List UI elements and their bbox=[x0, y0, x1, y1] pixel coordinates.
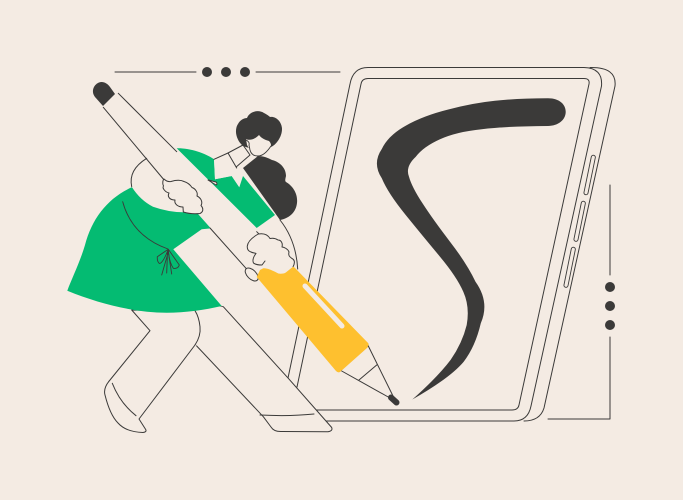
hair bbox=[236, 111, 282, 150]
pencil highlight bbox=[305, 286, 342, 326]
back hair bbox=[243, 156, 297, 220]
dress seam and bow bbox=[123, 202, 179, 275]
collar outline bbox=[214, 153, 237, 168]
giant pencil barrel bbox=[103, 93, 285, 282]
right arm outline bbox=[280, 220, 298, 269]
neck and head bbox=[214, 111, 282, 187]
tablet side buttons bbox=[566, 157, 593, 285]
tablet bbox=[288, 67, 615, 421]
pencil edges bbox=[103, 93, 259, 268]
pencil cap bbox=[93, 82, 115, 106]
upper hand bbox=[163, 179, 203, 214]
decoration: top dots and lines bbox=[115, 67, 340, 77]
arm left outline bbox=[131, 158, 147, 187]
front leg bbox=[190, 300, 332, 432]
face outline and ear bbox=[246, 140, 271, 156]
collar bbox=[214, 153, 243, 187]
dress skirt bbox=[67, 187, 222, 313]
back leg bbox=[105, 310, 200, 432]
lower hand bbox=[247, 234, 294, 267]
small thumb on barrel bbox=[208, 180, 217, 185]
brush stroke: S curve bbox=[377, 98, 566, 400]
pencil nib bbox=[342, 346, 396, 402]
lower thumb bbox=[243, 266, 261, 283]
decoration: right dots and bracket bbox=[548, 185, 615, 419]
shoe line bbox=[260, 414, 314, 416]
dress bodice bbox=[177, 148, 275, 228]
neck bbox=[228, 145, 250, 168]
tablet frame bbox=[288, 68, 602, 421]
arm left bbox=[131, 158, 205, 213]
tablet back edge bbox=[524, 67, 615, 421]
face bbox=[246, 135, 271, 156]
pencil yellow body bbox=[257, 267, 369, 372]
shoe line bbox=[112, 383, 136, 416]
right arm bbox=[250, 220, 298, 280]
tablet screen bbox=[297, 78, 589, 410]
dress bbox=[67, 148, 275, 313]
front leg cover bbox=[170, 300, 223, 346]
woman bbox=[67, 82, 397, 432]
